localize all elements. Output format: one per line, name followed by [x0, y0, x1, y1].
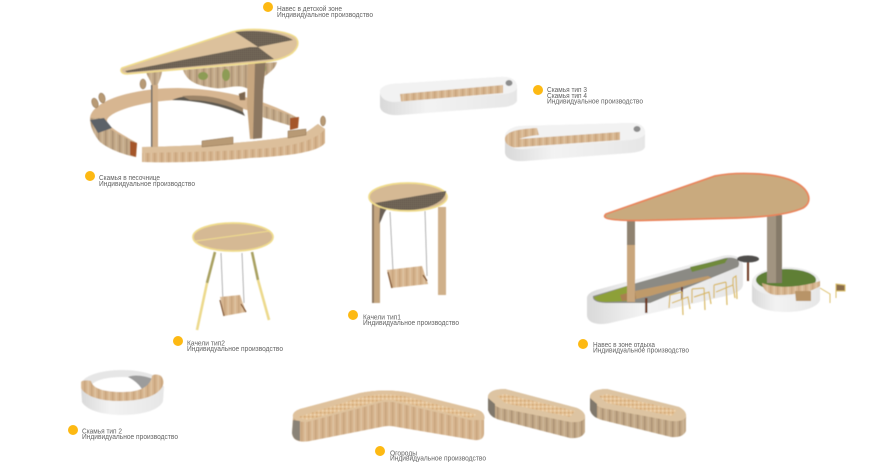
round planter: [752, 267, 820, 312]
hanging slatted panel: [183, 62, 277, 90]
sandpit bench: rear curve: [90, 88, 298, 157]
posts: [372, 203, 446, 303]
label: bench types 3 and 4: Индивидуальное производство: [547, 98, 643, 106]
object: children's area canopy with sandpit bench: [90, 30, 326, 162]
label: swing type 1: Индивидуальное производство: [363, 320, 459, 327]
label: garden beds: Индивидуальное производство: [390, 456, 486, 462]
round top: [193, 223, 273, 251]
object: garden bed 3: [590, 389, 686, 437]
left bracket and post: [146, 71, 162, 147]
right post: [247, 60, 266, 139]
canopy roof: [605, 174, 809, 220]
wood seat: [505, 128, 620, 148]
label: swing type 1: Качели тип1: [363, 314, 401, 322]
object: L-shaped garden bed: [292, 390, 484, 442]
label: swing type 1: [348, 310, 459, 327]
object: bench type 4: [505, 123, 645, 161]
label: swing type 2: Индивидуальное производство: [187, 346, 283, 353]
label: bench type 2: Скамья тип 2: [82, 428, 122, 436]
outdoor chair: [820, 284, 845, 303]
object: rest area canopy: [587, 174, 845, 324]
label: children's area canopy: Навес в детской зоне: [277, 5, 342, 13]
label: rest area canopy: [578, 339, 689, 354]
ropes: [390, 211, 427, 276]
label: children's area canopy: Индивидуальное производство: [277, 12, 373, 19]
canopy roof: [121, 30, 298, 74]
seat: [220, 295, 246, 316]
ropes: [221, 253, 244, 303]
label: rest area canopy: Индивидуальное производство: [593, 348, 689, 354]
label: sandpit bench: Скамья в песочнице: [99, 175, 160, 182]
bench end caps: [130, 117, 299, 157]
round side table: [737, 256, 759, 281]
label: garden beds: [375, 446, 486, 462]
label: bench type 2: Индивидуальное производство: [82, 434, 178, 441]
label: swing type 2: [173, 336, 283, 353]
wood seat: [81, 374, 163, 401]
label: sandpit bench: [85, 171, 195, 188]
label: sandpit bench: Индивидуальное производство: [99, 181, 195, 188]
right post: [767, 215, 782, 283]
round top: [369, 183, 447, 211]
object: swing type 2: [193, 223, 273, 330]
left post: [627, 221, 635, 302]
label: bench type 2: [68, 425, 178, 441]
label: children's area canopy: [263, 2, 373, 19]
yellow bar stools: [669, 276, 737, 315]
wood seat: [400, 85, 503, 102]
object: garden bed 2: [488, 389, 585, 438]
seat: [387, 266, 428, 288]
sandpit bench: front curve: [142, 124, 325, 162]
object: swing type 1: [369, 183, 447, 303]
label: swing type 2: Качели тип2: [187, 340, 225, 348]
legs: [197, 252, 269, 330]
bar counter: [620, 276, 712, 313]
seat backs and chairs: [90, 79, 326, 147]
object: bench type 2 ring: [81, 370, 164, 415]
long planter: [587, 255, 743, 324]
label: bench types 3 and 4: Скамья тип 4: [547, 93, 587, 100]
object: bench type 3: [380, 77, 517, 115]
label: bench types 3 and 4: Скамья тип 3: [547, 87, 587, 94]
label: rest area canopy: Навес в зоне отдыха: [593, 342, 655, 349]
label: garden beds: Огороды: [390, 450, 417, 458]
label: bench types 3 and 4: [533, 85, 643, 106]
